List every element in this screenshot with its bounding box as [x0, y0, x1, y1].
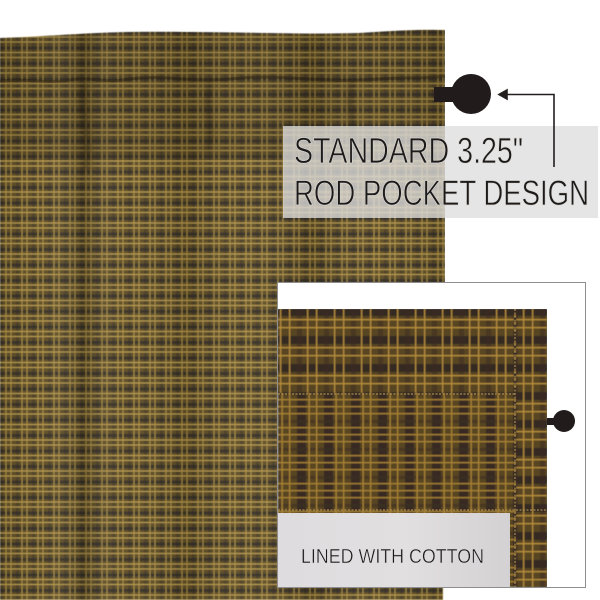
inset panel: cotton lining detail [278, 282, 586, 588]
callout: rod pocket label [283, 126, 598, 218]
rod pocket stitching line [0, 76, 445, 81]
large curtain rod end [434, 74, 491, 114]
inset side hem fabric [516, 309, 547, 587]
curtain panel: plaid fabric [0, 30, 445, 600]
callout text line one: STANDARD 3.25" [294, 130, 523, 171]
arrow pointing to rod pocket [499, 90, 554, 167]
gathered fold shadows [82, 82, 353, 170]
cotton lining swatch [278, 513, 510, 587]
small curtain rod end [547, 410, 575, 432]
rod pocket shading [0, 30, 445, 160]
lining label: LINED WITH COTTON [301, 546, 484, 568]
inset stitching [278, 309, 547, 587]
inset fabric lower section [278, 309, 547, 587]
inset upper hem fabric [278, 309, 514, 393]
